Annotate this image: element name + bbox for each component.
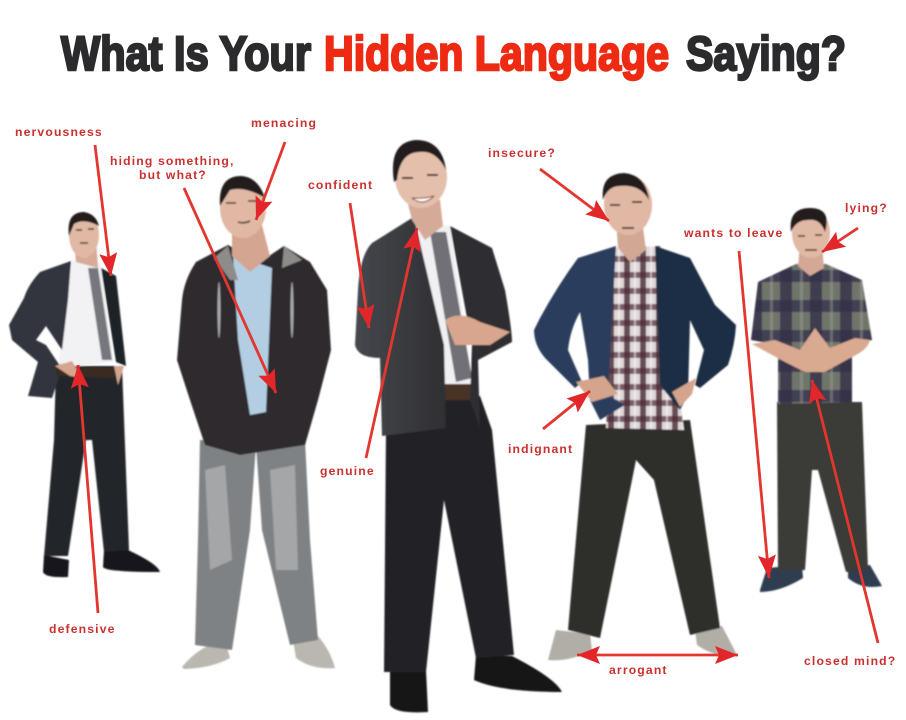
labels: insecure? [488,146,556,160]
labels: lying? [845,201,888,215]
figure 1: man in suit looking up [9,212,160,577]
labels: arrogant [609,663,668,677]
title: Hidden Language [324,28,669,81]
labels: but what? [139,168,207,182]
labels: menacing [251,116,317,130]
title [61,28,846,81]
labels [15,116,896,677]
figure 5: man in plaid shirt with steepled hands [751,208,882,592]
figure 2: man in grey hoodie and jeans [177,176,335,669]
title: What Is Your [61,28,311,81]
labels: nervousness [15,125,103,139]
labels: hiding something, [110,154,234,168]
labels: closed mind? [804,654,896,668]
labels: wants to leave [683,226,783,240]
title: Saying? [686,28,846,81]
labels: defensive [49,622,116,636]
labels: indignant [508,442,573,456]
figure 3: smiling man in charcoal suit [355,140,562,712]
labels: confident [308,178,373,192]
figures group [9,140,882,712]
figure 4: man in navy blazer and plaid shirt [534,173,737,660]
arrows [78,142,878,655]
labels: genuine [320,464,375,478]
